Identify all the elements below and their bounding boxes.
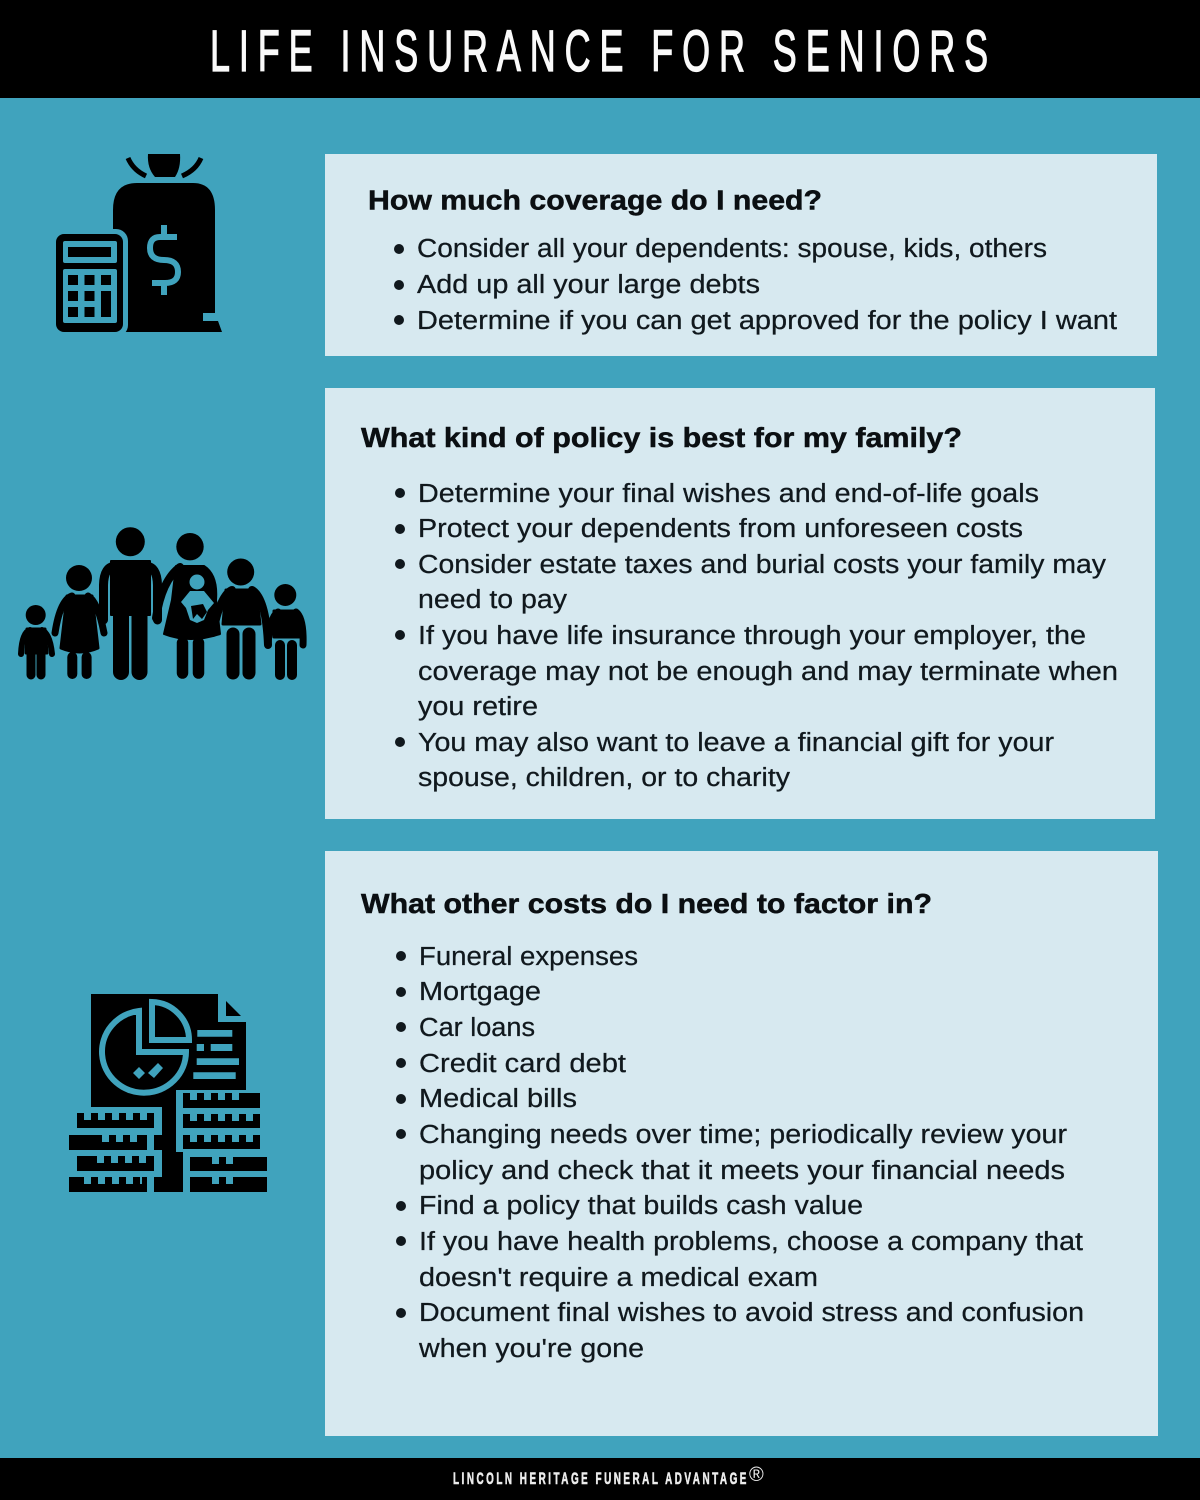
list: other costs (396, 943, 1084, 1363)
list: other costs: Medical bills (419, 1085, 577, 1113)
list: other costs: Document final wishes to avoid stress and confusion (419, 1299, 1084, 1327)
panel: other costs (325, 851, 1158, 1436)
list: other costs: Mortgage (419, 978, 541, 1006)
footer banner: LINCOLN HERITAGE FUNERAL ADVANTAGE (453, 1469, 746, 1488)
list: policy considerations: need to pay (418, 586, 567, 614)
title banner (0, 0, 1200, 98)
list: other costs: Credit card debt (419, 1050, 626, 1078)
list: other costs: Funeral expenses (419, 943, 638, 971)
list: other costs: policy and check that it meets your financial needs (419, 1157, 1065, 1185)
list: policy considerations: If you have life insurance through your employer, the (418, 622, 1086, 650)
list: policy considerations: You may also want to leave a financial gift for your (418, 729, 1055, 757)
icon: money bag and calculator (51, 154, 222, 337)
list: policy considerations: Consider estate taxes and burial costs your family may (418, 551, 1106, 579)
list: other costs: doesn't require a medical exam (419, 1264, 818, 1292)
panel: how much coverage (325, 154, 1157, 356)
footer banner: ® (749, 1464, 764, 1486)
list: policy considerations: you retire (418, 693, 538, 721)
list: coverage considerations: Add up all your large debts (417, 271, 760, 299)
list: policy considerations: Protect your dependents from unforeseen costs (418, 515, 1023, 543)
list: policy considerations: spouse, children, or to charity (418, 764, 790, 792)
panel: policy type (325, 388, 1155, 819)
list: policy considerations (395, 480, 1118, 792)
icon: family (21, 527, 303, 675)
list: policy considerations: Determine your final wishes and end-of-life goals (418, 480, 1039, 508)
icon: financial report and coins (69, 994, 267, 1192)
title banner: LIFE INSURANCE FOR SENIORS (210, 19, 988, 84)
heading: other costs: What other costs do I need to factor in? (361, 888, 932, 919)
list: other costs: Find a policy that builds cash value (419, 1192, 863, 1220)
heading: how much coverage: How much coverage do I need? (368, 184, 822, 216)
list: coverage considerations (394, 235, 1117, 335)
list: other costs: If you have health problems, choose a company that (419, 1228, 1083, 1256)
list: policy considerations: coverage may not be enough and may terminate when (418, 658, 1118, 686)
list: coverage considerations: Determine if you can get approved for the policy I want (417, 307, 1117, 335)
footer banner (0, 1458, 1200, 1500)
list: other costs: Changing needs over time; periodically review your (419, 1121, 1068, 1149)
list: other costs: when you're gone (418, 1335, 644, 1363)
heading: policy type: What kind of policy is best for my family? (361, 422, 962, 453)
list: other costs: Car loans (419, 1014, 535, 1042)
list: coverage considerations: Consider all your dependents: spouse, kids, others (417, 235, 1047, 263)
